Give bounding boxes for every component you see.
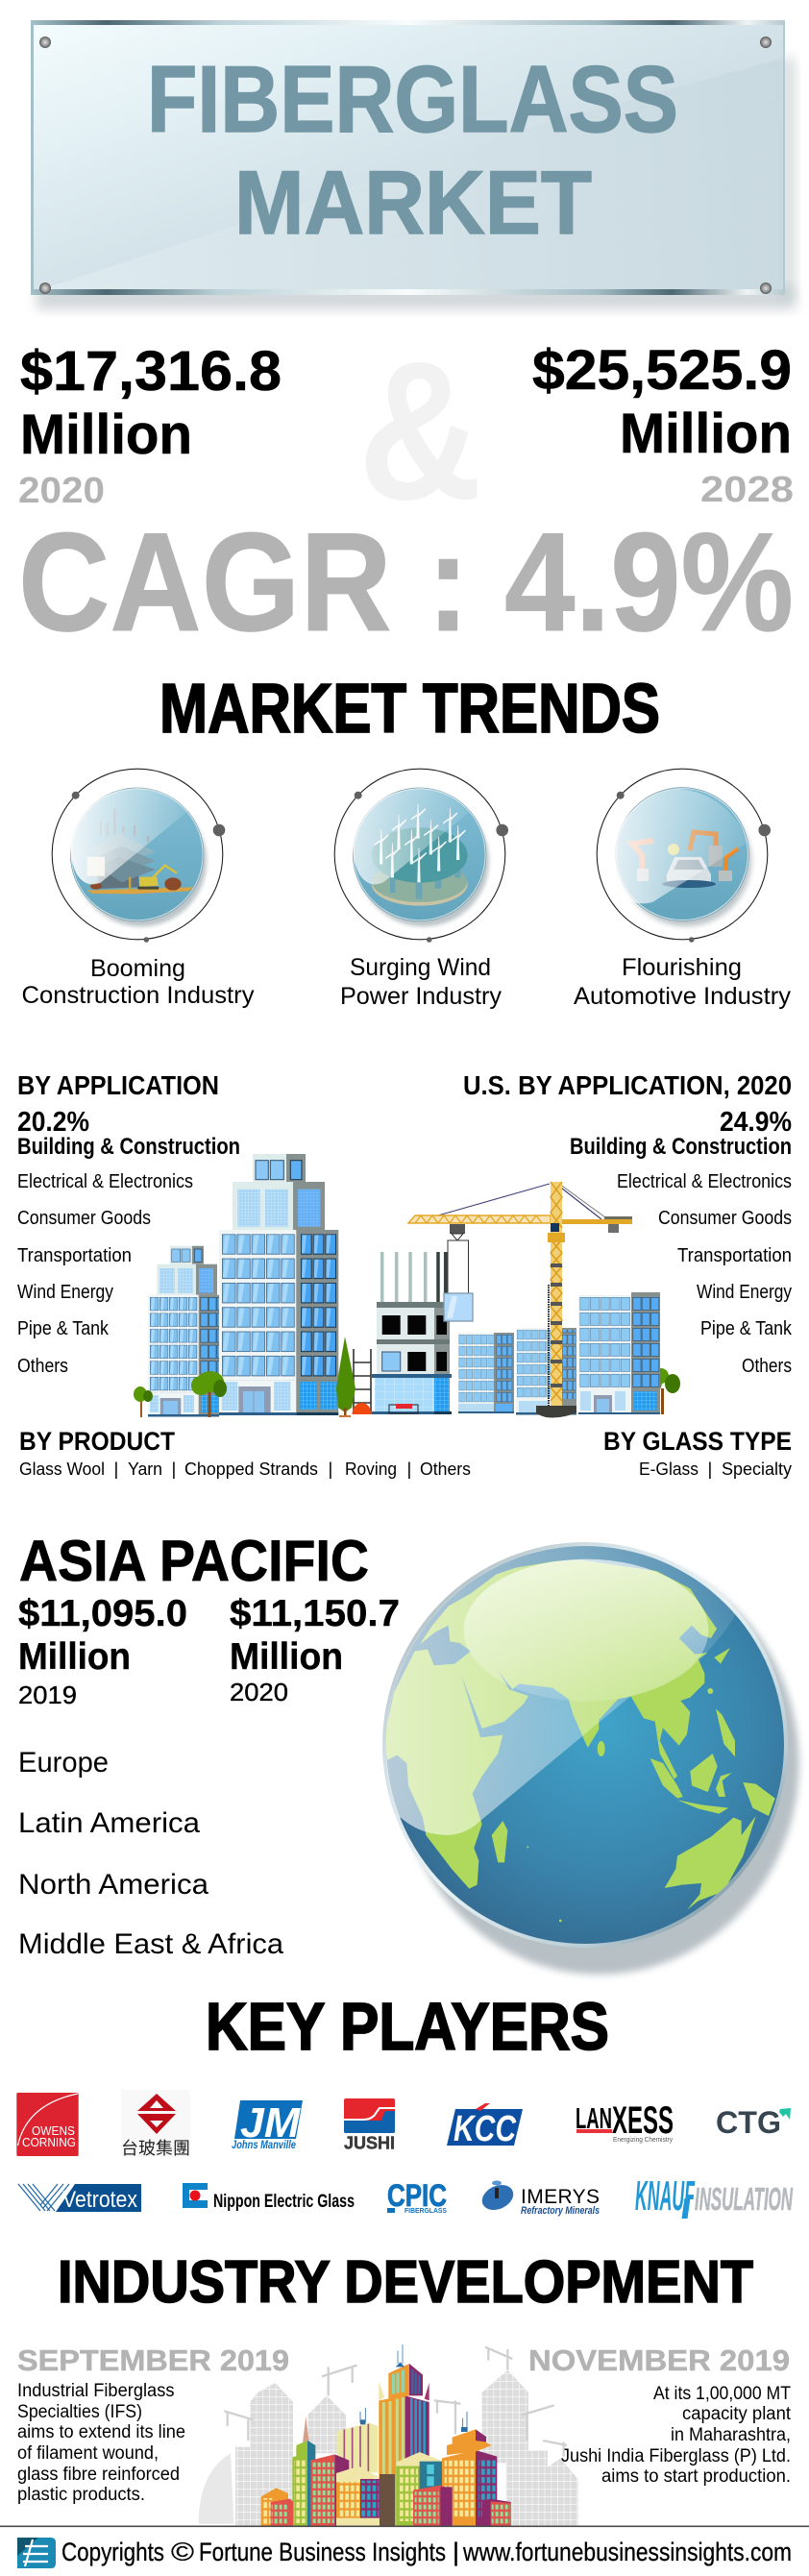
footer: copyright bar xyxy=(0,2525,809,2568)
panel: by application list (global): Pipe & Tank xyxy=(17,1318,110,1339)
ampersand background glyph: & xyxy=(358,321,482,541)
title glass plaque xyxy=(31,20,796,309)
text block: September 2019 development: glass fibre reinforced xyxy=(17,2465,180,2485)
stat: 2028 market value: 2028 xyxy=(700,470,794,510)
panel: by glass type: E-Glass xyxy=(639,1459,699,1479)
trend: wind power xyxy=(334,769,508,1010)
small left building xyxy=(148,1246,219,1416)
copyright text: Copyrights xyxy=(61,2538,164,2566)
panel: regional stats: Europe xyxy=(18,1747,109,1779)
text block: November 2019 development: NOVEMBER 2019 xyxy=(528,2343,790,2377)
panel: regional stats: Million xyxy=(230,1636,343,1678)
text block: November 2019 development: Jushi India Fiberglass (P) Ltd. xyxy=(561,2446,791,2466)
title text xyxy=(147,46,678,253)
text block: September 2019 development: of filament wound, xyxy=(17,2443,159,2464)
panel: U.S. by application list xyxy=(463,1070,793,1377)
label: Surging Wind xyxy=(350,954,491,981)
panel: regional stats: Middle East & Africa xyxy=(18,1928,283,1960)
logo: CPIC: CPIC xyxy=(387,2178,447,2213)
logo: KCC: KCC xyxy=(454,2109,516,2149)
icon: Fortune Business Insights logo xyxy=(17,2538,56,2568)
label: Power Industry xyxy=(340,983,502,1010)
panel: by product: Roving xyxy=(345,1459,397,1479)
tall building xyxy=(219,1154,338,1415)
copyright text: © xyxy=(171,2538,194,2566)
panel: by product: | xyxy=(329,1459,332,1479)
ghost skyline xyxy=(199,2347,578,2525)
logo: Taiwan Glass xyxy=(121,2090,190,2158)
text block: September 2019 development: plastic products. xyxy=(17,2485,145,2505)
logo: Johns Manville: Johns Manville xyxy=(232,2138,296,2151)
panel: regional stats xyxy=(18,1529,400,1960)
panel: by product: Glass Wool xyxy=(19,1459,105,1479)
panel: regional stats: 2020 xyxy=(230,1678,288,1706)
stat: 2028 market value: Million xyxy=(620,403,792,465)
panel: by product: BY PRODUCT xyxy=(19,1427,175,1456)
title text: FIBERGLASS xyxy=(147,46,678,152)
orbit ring and dots xyxy=(597,769,771,943)
logo: Imerys: Refractory Minerals xyxy=(521,2205,600,2217)
panel: by application list (global): Wind Energy xyxy=(17,1282,113,1303)
text block: November 2019 development: capacity plant xyxy=(682,2404,792,2424)
panel: by product: | xyxy=(113,1459,118,1479)
text block: November 2019 development: At its 1,00,000 MT xyxy=(653,2384,791,2404)
panel: by product: Others xyxy=(420,1459,471,1479)
panel: by application list (global): Building & Construction xyxy=(17,1134,240,1160)
panel: regional stats: ASIA PACIFIC xyxy=(19,1529,369,1593)
panel: regional stats: 2019 xyxy=(18,1681,77,1709)
icon: construction site disc xyxy=(70,788,207,926)
land masses xyxy=(384,1559,775,1922)
panel: regional stats: $11,150.7 xyxy=(230,1593,400,1634)
stat: 2020 market value: Million xyxy=(20,404,192,466)
logo: Lanxess: Energizing Chemistry xyxy=(613,2137,673,2144)
panel: U.S. by application list: Transportation xyxy=(677,1245,792,1266)
text block: September 2019 development: SEPTEMBER 2019 xyxy=(17,2343,289,2377)
logo: Imerys: IMERYS xyxy=(521,2186,600,2208)
panel: U.S. by application list: Wind Energy xyxy=(697,1282,792,1303)
text block: November 2019 development: in Maharashtra, xyxy=(671,2425,791,2445)
label: Construction Industry xyxy=(21,982,255,1009)
logo: Lanxess xyxy=(576,2099,674,2144)
panel: by application list (global): Consumer Goods xyxy=(17,1208,151,1229)
panel: U.S. by application list: Consumer Goods xyxy=(658,1208,792,1229)
stat: 2028 market value xyxy=(532,339,794,510)
label: Flourishing xyxy=(622,954,742,981)
illustration: colourful city with ghost skyline xyxy=(199,2344,578,2526)
illustration: city skyline with crane xyxy=(134,1154,680,1417)
panel: regional stats: North America xyxy=(18,1869,208,1901)
illustration: globe xyxy=(381,1542,799,1975)
text block: September 2019 development xyxy=(17,2343,289,2505)
panel: by application list (global): BY APPLICATION xyxy=(17,1070,219,1100)
logo: Vetrotex: Vetrotex xyxy=(62,2187,137,2213)
heading: market trends: MARKET TRENDS xyxy=(159,671,660,748)
panel: by glass type: Specialty xyxy=(722,1459,793,1479)
panel: by application list (global) xyxy=(17,1070,240,1377)
panel: by application list (global): Others xyxy=(17,1356,68,1377)
panel: regional stats: Million xyxy=(18,1636,131,1678)
logo: Taiwan Glass: 台玻集團 xyxy=(121,2139,190,2158)
logo: Vetrotex xyxy=(18,2184,141,2213)
stat: 2028 market value: $25,525.9 xyxy=(532,339,792,402)
text block: November 2019 development: aims to start production. xyxy=(601,2466,791,2487)
orbit ring and dots xyxy=(52,769,225,943)
text block: September 2019 development: Specialties (IFS) xyxy=(17,2402,142,2422)
label xyxy=(574,954,792,1010)
panel: by application list (global): Electrical & Electronics xyxy=(17,1171,193,1192)
logo: Johns Manville: JM xyxy=(240,2099,301,2147)
panel: by application list (global): 20.2% xyxy=(17,1107,89,1138)
icon: car factory disc xyxy=(614,788,751,926)
logo: Owens Corning xyxy=(16,2093,79,2156)
trend: construction xyxy=(21,769,255,1009)
logo: Knauf Insulation: KNAUF xyxy=(635,2172,695,2220)
panel: by glass type: BY GLASS TYPE xyxy=(603,1427,792,1456)
tower crane with hanging glass panel xyxy=(408,1182,632,1417)
text block: September 2019 development: aims to extend its line xyxy=(17,2422,185,2442)
logo: Lanxess: XESS xyxy=(612,2099,674,2142)
panel: by product: Yarn xyxy=(128,1459,162,1479)
logo: Nippon Electric Glass xyxy=(183,2183,355,2212)
icon: wind farm disc xyxy=(353,788,489,926)
panel: by product: | xyxy=(407,1459,411,1479)
panel: regional stats: Latin America xyxy=(18,1807,200,1839)
logo: Lanxess: LAN xyxy=(576,2101,612,2135)
panel: by product xyxy=(19,1427,471,1479)
copyright text: | xyxy=(453,2538,459,2566)
panel: by product: | xyxy=(171,1459,176,1479)
label: Automotive Industry xyxy=(574,983,792,1010)
colour buildings xyxy=(261,2344,511,2526)
panel: regional stats: $11,095.0 xyxy=(18,1593,187,1634)
panel: U.S. by application list: 24.9% xyxy=(720,1107,792,1138)
label xyxy=(21,955,255,1009)
copyright text: Fortune Business Insights xyxy=(199,2538,446,2566)
logo: Owens Corning: CORNING xyxy=(22,2135,76,2149)
stat: 2020 market value: 2020 xyxy=(18,471,105,511)
logo: Jushi: JUSHI xyxy=(344,2134,395,2153)
panel: by product: Chopped Strands xyxy=(184,1459,318,1479)
heading: industry development: INDUSTRY DEVELOPMENT xyxy=(58,2249,753,2316)
orbit ring and dots xyxy=(334,769,508,943)
right buildings xyxy=(458,1292,660,1414)
copyright text xyxy=(61,2538,792,2566)
trend: automotive xyxy=(574,769,792,1010)
label xyxy=(340,954,502,1010)
panel: by glass type: | xyxy=(707,1459,712,1479)
logo: CPIC: FIBERGLASS xyxy=(404,2208,447,2215)
logo: CTG: CTG xyxy=(716,2105,781,2140)
panel: by application list (global): Transportation xyxy=(17,1245,132,1266)
heading: key players: KEY PLAYERS xyxy=(206,1989,609,2064)
logo: Imerys xyxy=(478,2180,600,2217)
stat: 2020 market value xyxy=(18,340,282,511)
scaffold, cone and trees xyxy=(134,1337,680,1417)
logo: Jushi xyxy=(344,2098,395,2153)
stat: 2020 market value: $17,316.8 xyxy=(20,340,282,403)
logo: Nippon Electric Glass: Nippon Electric Glass xyxy=(213,2192,355,2212)
panel: U.S. by application list: Electrical & Electronics xyxy=(617,1171,792,1192)
panel: by glass type xyxy=(603,1427,793,1479)
panel: U.S. by application list: Others xyxy=(742,1356,792,1377)
panel: U.S. by application list: Pipe & Tank xyxy=(700,1318,793,1339)
title text: MARKET xyxy=(234,152,592,253)
text block: September 2019 development: Industrial Fiberglass xyxy=(17,2381,175,2401)
text block: November 2019 development xyxy=(528,2343,792,2487)
centre building under construction xyxy=(372,1252,452,1414)
logo: Owens Corning: OWENS xyxy=(32,2123,75,2138)
label: Booming xyxy=(90,955,185,982)
